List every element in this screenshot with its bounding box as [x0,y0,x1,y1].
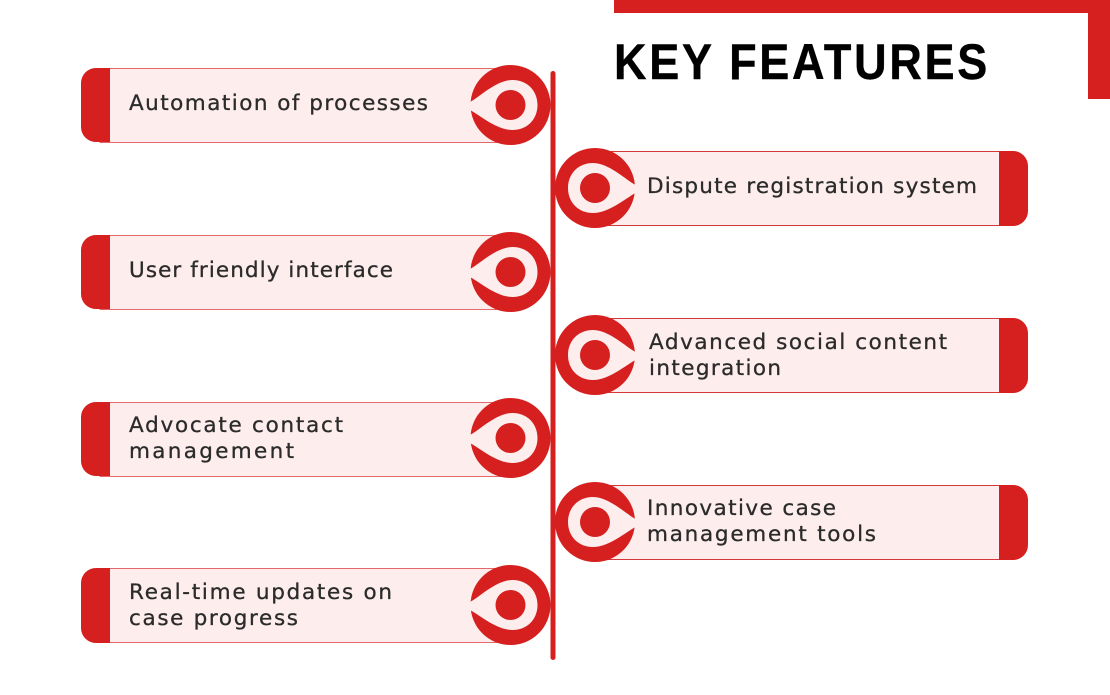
item: Innovative case management tools: management tools [647,522,876,547]
item: User friendly interface [81,232,550,312]
item: User friendly interface: User friendly interface [129,258,393,283]
item: Innovative case management tools: Innovative case [647,496,836,521]
item: Real-time updates on case progress [81,565,550,645]
corner frame [614,0,1110,99]
item: Advocate contact management [81,398,550,478]
item: Advanced social content integration: integration [649,356,781,381]
item: Dispute registration system [555,148,1028,228]
item: Real-time updates on case progress: case progress [129,606,298,631]
item: Real-time updates on case progress: Real-time updates on [129,580,392,605]
timeline spine [550,71,556,660]
item: Advocate contact management: management [129,439,294,464]
item: Automation of processes: Automation of processes [129,91,428,116]
item: Dispute registration system: Dispute registration system [647,174,977,199]
item: Advocate contact management: Advocate contact [129,413,343,438]
item: Automation of processes [81,65,550,145]
item: Advanced social content integration [555,315,1028,395]
item: Advanced social content integration: Advanced social content [649,330,947,355]
item: Innovative case management tools [555,482,1028,562]
title: KEY FEATURES [614,34,990,90]
